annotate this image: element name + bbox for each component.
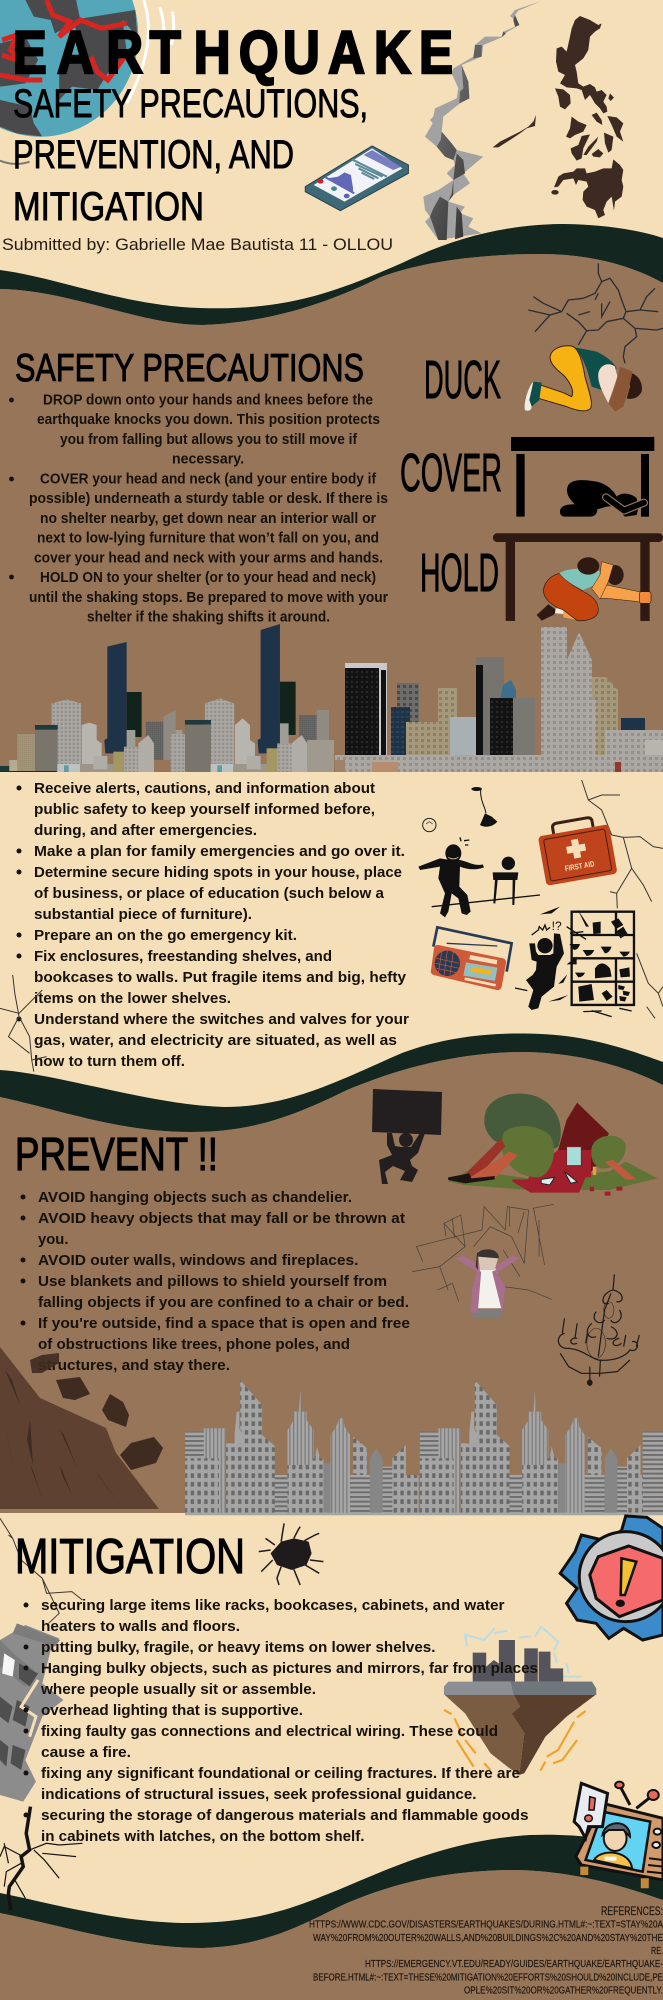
icon: person covering under table: [511, 437, 654, 517]
text block: preparation checklist: items on the lower shelves.: [34, 990, 231, 1007]
text block: mitigation measures: Hanging bulky objects, such as pictures and mirrors, far from places: [41, 1660, 538, 1677]
icon: globe with seismic cracks: [0, 0, 174, 164]
icon: map of the Philippines: [493, 16, 623, 218]
icon: cracked hole: [259, 1523, 323, 1585]
label: COVER: COVER: [400, 443, 502, 503]
wave band: bottom: [0, 1835, 663, 1948]
text block: duck cover hold steps: earthquake knocks you down. This position protects: [37, 412, 380, 428]
heading: mitigation: MITIGATION: [15, 1530, 245, 1584]
icon: chandelier: [558, 1274, 639, 1386]
text block: preparation checklist: Understand where the switches and valves for your: [34, 1011, 409, 1028]
icon: figure holding heavy block: [372, 1089, 442, 1184]
cracks: left edge of cream panel: [0, 975, 47, 1072]
label: DUCK: DUCK: [424, 350, 501, 410]
text block: duck cover hold steps: necessary.: [172, 452, 244, 468]
text block: preparation checklist: of business, or place of education (such below a: [34, 885, 385, 902]
subtitle: MITIGATION: [13, 185, 204, 229]
text block: duck cover hold steps: until the shaking stops. Be prepared to move with your: [29, 590, 388, 606]
text block: mitigation measures: where people usually sit or assemble.: [40, 1681, 316, 1698]
text block: duck cover hold steps: COVER your head and neck (and your entire body if: [40, 472, 376, 488]
text block: duck cover hold steps: DROP down onto your hands and knees before the: [43, 392, 373, 408]
text block: mitigation measures: overhead lighting that is supportive.: [41, 1702, 303, 1719]
icon: tilted cracked building: [0, 1623, 63, 1802]
text block: preparation checklist: substantial piece of furniture).: [34, 906, 252, 923]
author credit: Submitted by: Gabrielle Mae Bautista 11 - OLLOU: [2, 235, 393, 254]
text block: preparation checklist: Prepare an on the go emergency kit.: [34, 927, 297, 944]
text block: duck cover hold steps: HOLD ON to your shelter (or to your head and neck): [40, 570, 376, 586]
text block: preparation checklist: Fix enclosures, freestanding shelves, and: [34, 948, 332, 965]
icon: person and falling shelf items: [515, 907, 634, 1017]
text block: duck cover hold steps: no shelter nearby, get down near an interior wall or: [40, 511, 376, 527]
cracks: right edge of cream panel: [582, 780, 663, 1018]
icon: person ducking: [525, 346, 642, 412]
icon: floating island with city: [444, 1627, 596, 1775]
text block: duck cover hold steps: next to low-lying furniture that won’t fall on you, and: [37, 531, 379, 547]
text block: what to avoid: AVOID heavy objects that may fall or be thrown at: [38, 1210, 405, 1227]
title: EARTHQUAKE: [13, 19, 453, 86]
text block: mitigation measures: securing the storage of dangerous materials and flammable goods: [41, 1807, 528, 1824]
text block: preparation checklist: during, and after emergencies.: [34, 822, 257, 839]
icon: thick ground crack lower left: [0, 1807, 82, 1910]
text block: duck cover hold steps: shelter if the shaking shifts it around.: [87, 610, 330, 626]
text block: what to avoid: If you're outside, find a space that is open and free: [38, 1315, 410, 1332]
text block: preparation checklist: Determine secure hiding spots in your house, place: [34, 864, 402, 881]
text block: references: [309, 1904, 663, 1996]
text block: preparation checklist: bookcases to walls. Put fragile items and big, hefty: [34, 969, 407, 986]
text block: mitigation measures: securing large items like racks, bookcases, cabinets, and water: [41, 1597, 505, 1614]
icon: person holding table: [493, 533, 663, 621]
text block: mitigation measures: putting bulky, fragile, or heavy items on lower shelves.: [41, 1639, 436, 1656]
panel: prevent brown background: [0, 1052, 663, 1513]
panel: references brown background: [0, 1870, 663, 2000]
text block: mitigation measures: heaters to walls and floors.: [41, 1618, 240, 1635]
wave band: top: [0, 224, 663, 325]
text block: preparation checklist: [16, 780, 409, 1070]
cracks: mitigation panel upper left: [0, 1518, 82, 1623]
icon: person and falling shelf items: !?: [552, 919, 562, 933]
icon: ground fissure: [423, 1, 542, 240]
text block: duck cover hold steps: cover your head and neck with your arms and hands.: [34, 550, 383, 566]
text block: preparation checklist: public safety to keep yourself informed before,: [34, 801, 375, 818]
icon: person shaking by table: [418, 837, 540, 917]
text block: preparation checklist: Make a plan for family emergencies and go over it.: [34, 843, 405, 860]
text block: mitigation measures: cause a fire.: [41, 1744, 131, 1761]
text block: mitigation measures: fixing any significant foundational or ceiling fractures. If there are: [41, 1765, 520, 1782]
icon: smartphone with seismograph app: [305, 146, 408, 211]
text block: mitigation measures: indications of structural issues, seek professional guidance.: [41, 1786, 477, 1803]
text block: preparation checklist: how to turn them off.: [34, 1053, 185, 1070]
cityscape: modern skyline: [0, 624, 663, 772]
heading: prevent: PREVENT !!: [15, 1128, 218, 1180]
text block: what to avoid: falling objects if you are confined to a chair or bed.: [38, 1294, 409, 1311]
cityscape: gray silhouette skyline: [185, 1380, 663, 1515]
icon: warning gear: [560, 1516, 663, 1640]
subtitle: SAFETY PRECAUTIONS,: [13, 82, 368, 126]
text block: duck cover hold steps: you from falling but allows you to still move if: [60, 432, 357, 448]
text block: duck cover hold steps: possible) underneath a sturdy table or desk. If there is: [29, 491, 388, 507]
text block: what to avoid: AVOID outer walls, windows and fireplaces.: [38, 1252, 358, 1269]
label: HOLD: HOLD: [420, 543, 499, 603]
text block: preparation checklist: gas, water, and electricity are situated, as well as: [34, 1032, 397, 1049]
icon: swinging lamp and clock: [423, 787, 497, 832]
text block: what to avoid: you.: [38, 1231, 68, 1248]
subtitle: [13, 82, 368, 229]
icon: landslide with falling rocks: [0, 1347, 163, 1509]
text block: preparation checklist: Receive alerts, cautions, and information about: [34, 780, 375, 797]
icon: woman amid collapsing city sketch: [412, 1204, 554, 1318]
icon: collapsing house with trees: [448, 1093, 657, 1196]
text block: mitigation measures: in cabinets with latches, on the bottom shelf.: [41, 1828, 364, 1845]
text block: duck cover hold steps: [9, 392, 388, 626]
icon: ground cracks above duck figure: [528, 263, 663, 363]
text block: what to avoid: AVOID hanging objects such as chandelier.: [38, 1189, 352, 1206]
subtitle: PREVENTION, AND: [13, 133, 294, 177]
heading: safety precautions: SAFETY PRECAUTIONS: [15, 347, 364, 390]
icon: first aid kit: [536, 814, 617, 886]
wave band: middle: [0, 1033, 663, 1132]
icon: radio: [431, 927, 512, 990]
panel: safety precautions brown background: [0, 254, 663, 772]
text block: what to avoid: structures, and stay there.: [38, 1357, 230, 1374]
icon: television news alert: [574, 1782, 663, 1888]
text block: mitigation measures: [24, 1597, 538, 1845]
text block: what to avoid: of obstructions like trees, phone poles, and: [38, 1336, 350, 1353]
text block: what to avoid: [20, 1189, 410, 1374]
text block: mitigation measures: fixing faulty gas connections and electrical wiring. These could: [41, 1723, 498, 1740]
text block: what to avoid: Use blankets and pillows to shield yourself from: [38, 1273, 387, 1290]
icon: first aid kit: FIRST AID: [564, 859, 595, 873]
